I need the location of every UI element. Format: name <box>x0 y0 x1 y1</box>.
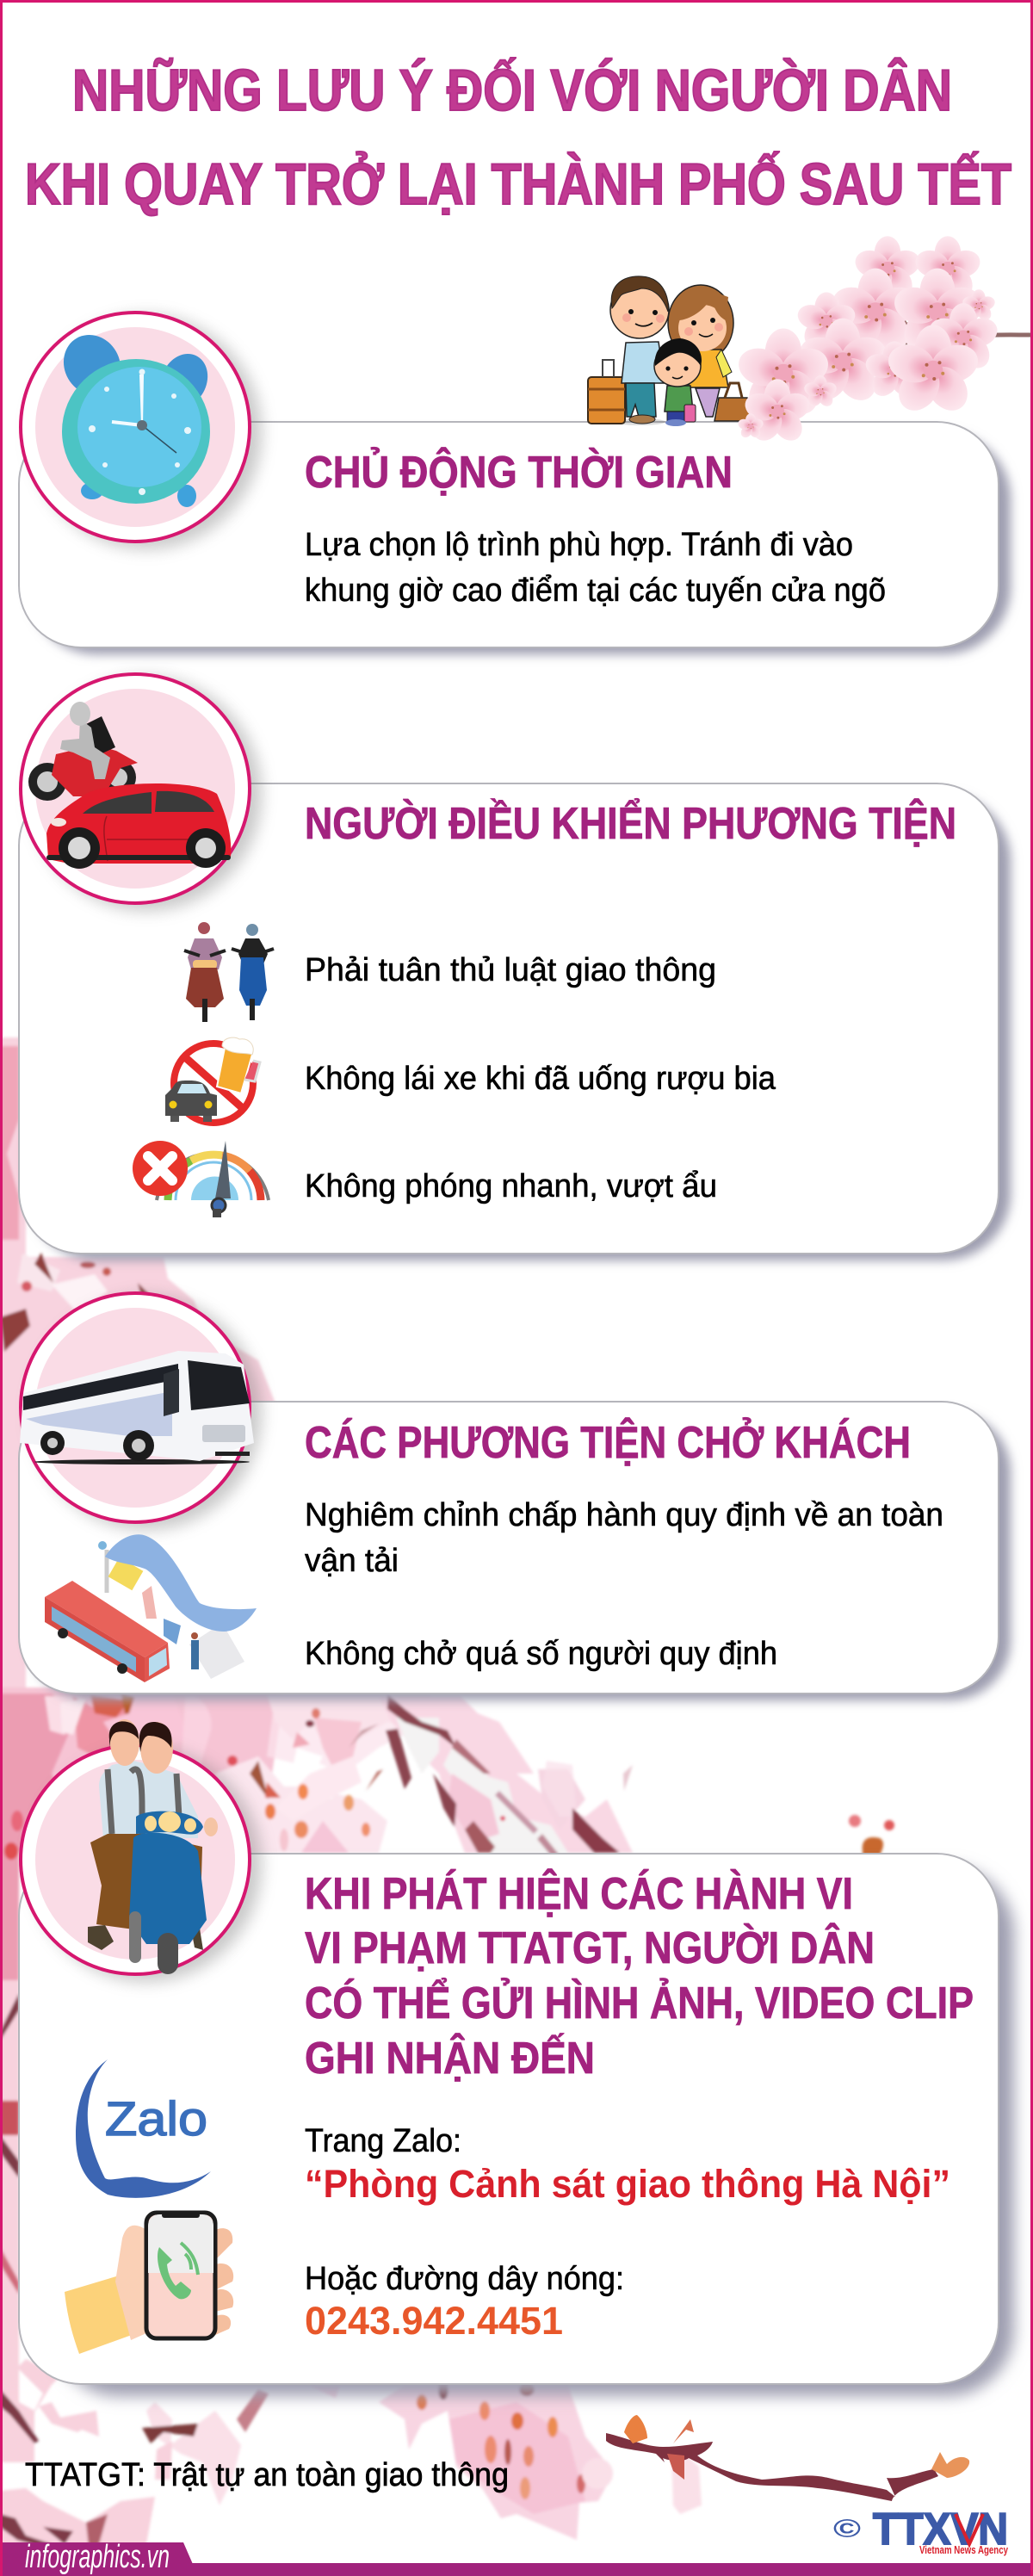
icon: TTXVN logo: © <box>833 2515 861 2543</box>
text: body 1: khung giờ cao điểm tại các tuyến cửa ngõ <box>305 573 886 609</box>
panel: reporting badge <box>21 1719 262 1982</box>
icon: hand holding phone <box>65 2213 233 2354</box>
heading: reporting: KHI PHÁT HIỆN CÁC HÀNH VI <box>305 1868 853 1919</box>
icon: motorbike rider <box>28 702 138 801</box>
text: passenger rule 1: vận tải <box>305 1543 399 1579</box>
text: passenger rule 2: Không chở quá số người quy định <box>305 1636 777 1672</box>
text: footnote: TTATGT: Trật tự an toàn giao thông <box>25 2457 509 2493</box>
icon: alarm clock <box>53 325 216 507</box>
card 2 <box>19 783 1011 1260</box>
icon: no drink driving <box>165 1037 260 1123</box>
footer bar: infographics.vn <box>25 2539 170 2575</box>
icon: city bus at stop <box>45 1534 257 1682</box>
icon: no speeding gauge <box>133 1141 269 1217</box>
icon: zalo logo: Zalo <box>105 2091 207 2146</box>
card 4 <box>19 1854 1014 2396</box>
icon: family with luggage <box>588 276 753 426</box>
heading: chủ động thời gian: CHỦ ĐỘNG THỜI GIAN <box>305 447 733 498</box>
icon: cherry blossom branch <box>733 236 1031 446</box>
icon: two motorbike riders <box>184 922 274 1022</box>
icon: red car <box>46 783 231 869</box>
text: hotline: Hoặc đường dây nóng: <box>305 2261 624 2297</box>
icon: TTXVN logo: TTXVN <box>873 2505 1008 2554</box>
text: rule 2: Không lái xe khi đã uống rượu bia <box>305 1061 776 1097</box>
background: branch with buds <box>606 2415 969 2501</box>
text: body 1: Lựa chọn lộ trình phù hợp. Tránh đi vào <box>305 527 853 563</box>
heading: reporting: VI PHẠM TTATGT, NGƯỜI DÂN <box>305 1923 875 1973</box>
text: zalo page: Trang Zalo: <box>305 2123 461 2159</box>
text: hotline <box>305 2261 624 2343</box>
text: body 1 <box>305 527 886 609</box>
panel: bus badge <box>20 1293 262 1530</box>
panel: driver badge <box>21 674 262 911</box>
card 1 <box>19 422 1011 654</box>
title <box>25 57 1011 217</box>
icon: zalo logo <box>76 2059 211 2198</box>
card 3 <box>19 1402 1011 1700</box>
text: rule 3: Không phóng nhanh, vượt ẩu <box>305 1168 717 1204</box>
text: passenger rule 1: Nghiêm chỉnh chấp hành quy định về an toàn <box>305 1497 943 1533</box>
text: hotline: 0243.942.4451 <box>305 2299 563 2343</box>
text: zalo page: “Phòng Cảnh sát giao thông Hà Nội” <box>305 2162 950 2206</box>
panel: clock badge <box>21 313 262 549</box>
heading: các phương tiện chở khách: CÁC PHƯƠNG TIỆN CHỞ KHÁCH <box>305 1417 911 1468</box>
heading: reporting <box>305 1868 974 2084</box>
heading: reporting: GHI NHẬN ĐẾN <box>305 2033 595 2084</box>
icon: couple on motorbike <box>88 1719 218 1974</box>
background: cherry blossom wash <box>0 1037 894 2570</box>
text: passenger rule 1 <box>305 1497 943 1579</box>
text: zalo page <box>305 2123 950 2206</box>
footer bar <box>0 2539 1033 2576</box>
text: rule 1: Phải tuân thủ luật giao thông <box>305 952 716 988</box>
icon: coach bus <box>20 1351 254 1464</box>
